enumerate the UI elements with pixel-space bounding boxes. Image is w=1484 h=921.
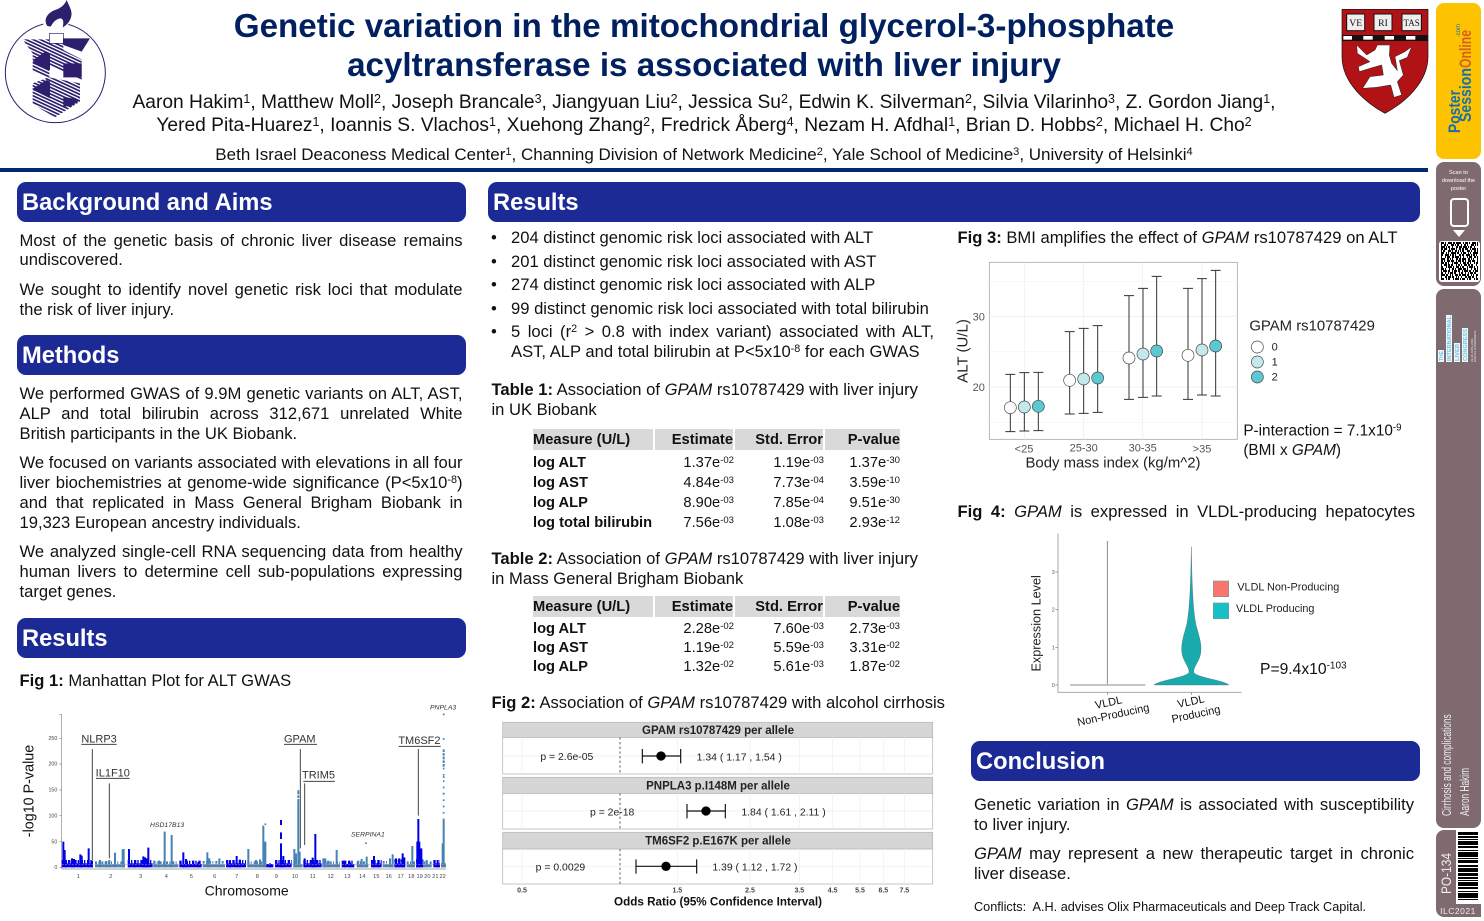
chart: manhattan plot: 21	[432, 874, 438, 880]
chart: violin plot of GPAM expression: VLDL Non-Producing	[1237, 582, 1339, 594]
chart: manhattan plot: Chromosome	[205, 882, 289, 898]
affiliations: Beth Israel Deaconess Medical Center1, Channing Division of Network Medicine2, Yale School of Medicine3, University of Helsinki4	[215, 145, 1193, 164]
sidebar: poster id and barcode: ILC2021	[1440, 906, 1476, 916]
heading: results main: Results	[493, 190, 579, 216]
chart: violin plot of GPAM expression: Non-Producing	[1076, 702, 1151, 729]
table 2: Mass General Brigham Biobank: 2.28e-02	[683, 621, 734, 637]
heading: results	[17, 618, 466, 658]
heading: results main	[488, 182, 1420, 222]
table 1: UK Biobank: 8.90e-03	[683, 495, 734, 511]
chart: violin plot of GPAM expression: VLDL	[1094, 694, 1123, 712]
figure 3 title: Fig 3: BMI amplifies the effect of GPAM rs10787429 on ALT	[958, 228, 1397, 247]
chart: manhattan plot: 11	[310, 874, 316, 880]
table 1: UK Biobank: P-value	[848, 432, 900, 448]
chart: manhattan plot: 20	[424, 874, 430, 880]
chart: manhattan plot: NLRP3	[81, 733, 117, 745]
chart: violin plot of GPAM expression: VLDL Producing	[1236, 603, 1314, 615]
chart: forest plot: Odds Ratio (95% Confidence Interval)	[614, 895, 822, 908]
text: GWAS methods: We performed GWAS of 9.9M genetic variants on ALT, AST,	[20, 384, 462, 403]
chart: forest plot: 1.34 ( 1.17 , 1.54 )	[697, 752, 782, 763]
chart: forest plot: 3.5	[794, 888, 804, 895]
text: variant selection: liver biochemistries at genome-wide significance (P<5x10-8)	[20, 473, 462, 492]
table 2: Mass General Brigham Biobank: P-value	[848, 599, 900, 615]
table 2: Mass General Brigham Biobank: 1.87e-02	[849, 659, 900, 675]
table 2 title: in Mass General Brigham Biobank	[492, 569, 743, 588]
sidebar: scan to download	[1436, 162, 1481, 286]
chart: forest plot: 4.5	[828, 888, 838, 895]
table 2 title	[492, 549, 918, 588]
chart: forest plot: 7.5	[899, 888, 909, 895]
chart: forest plot: PNPLA3 p.I148M per allele	[646, 780, 790, 792]
chart: manhattan plot: 19	[417, 874, 423, 880]
panel: conclusion	[971, 741, 1420, 914]
bullet list of findings: •	[491, 228, 497, 247]
chart: violin plot of GPAM expression: VLDL	[1176, 693, 1206, 711]
table 1: UK Biobank: Measure (U/L)	[533, 432, 630, 448]
table 2: Mass General Brigham Biobank: log AST	[533, 640, 588, 656]
chart: manhattan plot: 15	[373, 874, 379, 880]
chart: violin plot of GPAM expression: P=9.4x10	[1260, 661, 1327, 678]
panel: background and aims	[17, 182, 466, 319]
title: Genetic variation in the mitochondrial glycerol-3-phosphate	[234, 8, 1174, 45]
title	[234, 8, 1174, 84]
chart: ALT by BMI and genotype: 30-35	[1129, 443, 1157, 455]
chart: ALT by BMI and genotype: P-interaction = 7.1x10	[1243, 423, 1393, 440]
chart: forest plot: GPAM rs10787429 per allele	[642, 725, 794, 737]
chart: manhattan plot: 50	[51, 839, 57, 845]
text: therapeutic target: GPAM may represent a new therapeutic target in chronic	[974, 844, 1414, 863]
heading: background and aims: Background and Aims	[22, 190, 273, 216]
chart: manhattan plot: SERPINA1	[351, 832, 385, 839]
logo: university shield	[1342, 9, 1428, 114]
sidebar: scan to download: download the	[1442, 178, 1475, 184]
text: single-cell analysis: target genes.	[20, 582, 116, 601]
text: variant selection: and that replicated in Mass General Brigham Biobank in	[20, 493, 462, 512]
text: GWAS methods: ALP and total bilirubin across 312,671 unrelated White	[20, 404, 462, 423]
chart: ALT by BMI and genotype	[954, 262, 1402, 471]
chart: ALT by BMI and genotype: (BMI x GPAM)	[1243, 442, 1341, 459]
sidebar: poster session online tab: Session	[1456, 68, 1475, 122]
table 2: Mass General Brigham Biobank: 5.61e-03	[773, 659, 824, 675]
chart: ALT by BMI and genotype: 20	[973, 382, 985, 394]
table 1: UK Biobank: log ALT	[533, 455, 586, 471]
chart: manhattan plot: 6	[213, 874, 216, 880]
sidebar: congress information tab: 23-26 JUNE 2021	[1470, 338, 1474, 362]
text: aims	[20, 280, 462, 319]
bullet list of findings: •	[491, 252, 497, 271]
chart: manhattan plot: 1	[77, 874, 80, 880]
bullet list of findings: AST, ALP and total bilirubin at P<5x10-8 for each GWAS	[511, 342, 920, 361]
chart: violin plot of GPAM expression: Producing	[1171, 704, 1222, 726]
title: acyltransferase is associated with liver injury	[347, 47, 1061, 84]
chart: forest plot: p = 2e-18	[590, 807, 635, 818]
bullet list of findings: 5 loci (r2 > 0.8 with index variant) associated with ALT,	[511, 322, 934, 341]
chart: violin plot of GPAM expression: 3	[1052, 570, 1055, 576]
sidebar: poster session online tab: .com	[1456, 24, 1462, 37]
chart: forest plot: 2.5	[745, 888, 755, 895]
chart: forest plot: 6.5	[878, 888, 888, 895]
table 2: Mass General Brigham Biobank: Std. Error	[755, 599, 823, 615]
chart: violin plot of GPAM expression: -103	[1327, 660, 1347, 671]
table 1: UK Biobank	[533, 429, 900, 531]
chart: manhattan plot: 8	[256, 874, 259, 880]
bullet list of findings: •	[491, 275, 497, 294]
logo: medical center emblem	[4, 0, 106, 124]
table 1: UK Biobank: 7.73e-04	[773, 475, 824, 491]
text: conflicts: Conflicts: A.H. advises Olix Pharmaceuticals and Deep Track Capital.	[974, 900, 1366, 914]
chart: ALT by BMI and genotype: >35	[1193, 443, 1211, 455]
text: background: undiscovered.	[20, 250, 123, 269]
chart: forest plot	[502, 722, 934, 908]
heading: conclusion	[971, 741, 1420, 781]
text: background	[20, 230, 462, 269]
text: conclusion statement: to liver injury.	[974, 815, 1071, 834]
chart: manhattan plot: GPAM	[284, 733, 316, 745]
sidebar: poster id and barcode	[1436, 830, 1481, 917]
chart: ALT by BMI and genotype: -9	[1393, 423, 1401, 434]
chart: ALT by BMI and genotype: 1	[1272, 357, 1278, 369]
bullet list of findings: 204 distinct genomic risk loci associated with ALT	[511, 228, 873, 247]
header divider	[0, 168, 1428, 172]
chart: violin plot of GPAM expression: 0	[1052, 683, 1055, 689]
chart: violin plot of GPAM expression: Expression Level	[1030, 575, 1044, 672]
logo: university shield: RI	[1378, 18, 1388, 29]
text: therapeutic target	[974, 844, 1414, 883]
chart: manhattan plot: TM6SF2	[398, 735, 441, 747]
sidebar: poster id and barcode: PO-134	[1438, 853, 1454, 894]
chart: manhattan plot: 100	[48, 813, 57, 819]
chart: forest plot: p = 0.0029	[536, 862, 585, 873]
chart: ALT by BMI and genotype: GPAM rs10787429	[1249, 318, 1375, 334]
sidebar: congress information tab: CONGRESS	[1463, 328, 1469, 361]
chart: manhattan plot: 7	[235, 874, 238, 880]
text: single-cell analysis	[20, 542, 462, 601]
panel: methods	[17, 335, 466, 601]
sidebar: congress information tab: Cirrhosis and complications	[1440, 714, 1455, 816]
chart: manhattan plot	[21, 704, 456, 898]
text: single-cell analysis: human livers to determine cell sub-populations expressing	[20, 562, 462, 581]
chart: manhattan plot: 9	[275, 874, 278, 880]
chart: ALT by BMI and genotype: 25-30	[1070, 443, 1098, 455]
bullet list of findings: 201 distinct genomic risk loci associated with AST	[511, 252, 876, 271]
panel: results main	[488, 182, 1420, 908]
table 1 title	[492, 380, 918, 419]
table 1: UK Biobank: 1.37e-02	[683, 455, 734, 471]
text: therapeutic target: liver disease.	[974, 864, 1071, 883]
table 1: UK Biobank: log ALP	[533, 495, 588, 511]
table 2: Mass General Brigham Biobank: log ALP	[533, 659, 588, 675]
chart: forest plot: 5.5	[855, 888, 865, 895]
heading: results: Results	[22, 626, 108, 652]
chart: manhattan plot: 14	[359, 874, 365, 880]
chart: manhattan plot: 17	[398, 874, 404, 880]
text: aims: We sought to identify novel genetic risk loci that modulate	[20, 280, 462, 299]
table 1: UK Biobank: 9.51e-30	[849, 495, 900, 511]
chart: manhattan plot: 22	[440, 874, 446, 880]
authors: Aaron Hakim1, Matthew Moll2, Joseph Brancale3, Jiangyuan Liu2, Jessica Su2, Edwin K. Silverman2, Silvia Vilarinho3, Z. Gordon Jiang1,	[132, 92, 1276, 113]
chart: manhattan plot: 5	[190, 874, 193, 880]
text: GWAS methods	[20, 384, 462, 443]
chart: manhattan plot: 200	[48, 762, 57, 768]
table 1: UK Biobank: 7.56e-03	[683, 515, 734, 531]
chart: manhattan plot: 18	[408, 874, 414, 880]
table 2: Mass General Brigham Biobank: 1.32e-02	[683, 659, 734, 675]
table 2 title: Table 2: Association of GPAM rs10787429 with liver injury	[492, 549, 918, 568]
sidebar: congress information tab: INTERNATIONAL	[1447, 316, 1453, 361]
heading: methods: Methods	[22, 343, 119, 369]
chart: ALT by BMI and genotype: <25	[1015, 443, 1033, 455]
text: conclusion statement: Genetic variation in GPAM is associated with susceptibility	[974, 795, 1414, 814]
text: variant selection: We focused on variants associated with elevations in all four	[20, 453, 462, 472]
sidebar: congress information tab	[1436, 289, 1481, 828]
table 2: Mass General Brigham Biobank: 5.59e-03	[773, 640, 824, 656]
authors: Yered Pita-Huarez1, Ioannis S. Vlachos1, Xuehong Zhang2, Fredrick Åberg4, Nezam H. Afdhal1, Brian D. Hobbs2, Michael H. Cho2	[156, 115, 1252, 136]
bullet list of findings: •	[491, 299, 497, 318]
table 1: UK Biobank: 1.19e-03	[773, 455, 824, 471]
table 2: Mass General Brigham Biobank: Estimate	[672, 599, 733, 615]
table 1: UK Biobank: Std. Error	[755, 432, 823, 448]
chart: ALT by BMI and genotype: 0	[1272, 342, 1278, 354]
table 2: Mass General Brigham Biobank	[533, 596, 900, 675]
chart: manhattan plot: HSD17B13	[150, 822, 184, 829]
chart: manhattan plot: 13	[344, 874, 350, 880]
table 1: UK Biobank: 1.08e-03	[773, 515, 824, 531]
chart: forest plot: 0.5	[517, 888, 527, 895]
table 1: UK Biobank: 3.59e-10	[849, 475, 900, 491]
bullet list of findings: •	[491, 322, 497, 341]
logo: university shield: TAS	[1404, 18, 1420, 28]
text: GWAS methods: British participants in the UK Biobank.	[20, 424, 297, 443]
text: background: Most of the genetic basis of chronic liver disease remains	[20, 230, 462, 250]
chart: manhattan plot: 2	[109, 874, 112, 880]
text: aims: the risk of liver injury.	[20, 300, 174, 319]
sidebar: congress information tab: DIGITAL EXPERIENCE	[1473, 330, 1477, 362]
chart: violin plot of GPAM expression: 2	[1052, 608, 1055, 614]
table 1: UK Biobank: log total bilirubin	[533, 515, 652, 531]
figure 2 title: Fig 2: Association of GPAM rs10787429 with alcohol cirrhosis	[492, 693, 945, 712]
heading: conclusion: Conclusion	[976, 749, 1105, 775]
panel: results left	[17, 618, 466, 898]
chart: manhattan plot: 250	[48, 736, 57, 742]
heading: background and aims	[17, 182, 466, 222]
chart: manhattan plot: 12	[328, 874, 334, 880]
chart: manhattan plot: 10	[292, 874, 298, 880]
table 2: Mass General Brigham Biobank: 1.19e-02	[683, 640, 734, 656]
table 2: Mass General Brigham Biobank: log ALT	[533, 621, 586, 637]
text: conclusion statement	[974, 795, 1414, 834]
sidebar: poster session online tab: Online	[1456, 30, 1475, 68]
chart: manhattan plot: 3	[139, 874, 142, 880]
chart: manhattan plot: 4	[165, 874, 168, 880]
chart: manhattan plot: TRIM5	[302, 769, 335, 781]
text: single-cell analysis: We analyzed single-cell RNA sequencing data from healthy	[20, 542, 462, 561]
sidebar: scan to download: poster	[1451, 186, 1466, 192]
table 1: UK Biobank: 7.85e-04	[773, 495, 824, 511]
sidebar: poster session online tab	[1436, 3, 1481, 159]
bullet list of findings: 99 distinct genomic risk loci associated with total bilirubin	[511, 299, 929, 318]
table 2: Mass General Brigham Biobank: Measure (U/L)	[533, 599, 630, 615]
chart: manhattan plot: 150	[48, 788, 57, 794]
text: variant selection	[20, 453, 462, 532]
chart: ALT by BMI and genotype: Body mass index (kg/m^2)	[1026, 455, 1201, 471]
chart: ALT by BMI and genotype: ALT (U/L)	[954, 319, 971, 383]
chart: forest plot: 1.39 ( 1.12 , 1.72 )	[712, 863, 798, 874]
table 1: UK Biobank: 4.84e-03	[683, 475, 734, 491]
bullet list of findings: 274 distinct genomic risk loci associated with ALP	[511, 275, 875, 294]
chart: ALT by BMI and genotype: 2	[1272, 372, 1278, 384]
chart: forest plot: p = 2.6e-05	[540, 752, 594, 763]
table 1 title: in UK Biobank	[492, 400, 597, 419]
bullet list of findings	[491, 228, 934, 361]
figure 4 title: Fig 4: GPAM is expressed in VLDL-producing hepatocytes	[958, 502, 1415, 521]
chart: violin plot of GPAM expression: 1	[1052, 645, 1055, 651]
chart: manhattan plot: PNPLA3	[430, 704, 456, 711]
sidebar: poster session online tab: Poster	[1445, 90, 1464, 133]
logo: university shield: VE	[1349, 18, 1362, 29]
chart: forest plot: 1.5	[672, 888, 682, 895]
table 2: Mass General Brigham Biobank: 2.73e-03	[849, 621, 900, 637]
sidebar: scan to download: Scan to	[1449, 170, 1468, 176]
sidebar: congress information tab: LIVER	[1455, 344, 1461, 361]
authors	[132, 92, 1276, 136]
chart: manhattan plot: IL1F10	[96, 768, 130, 780]
chart: ALT by BMI and genotype: 30	[973, 311, 985, 323]
heading: methods	[17, 335, 466, 375]
table 2: Mass General Brigham Biobank: 3.31e-02	[849, 640, 900, 656]
table 1: UK Biobank: 2.93e-12	[849, 515, 900, 531]
table 1: UK Biobank: 1.37e-30	[849, 455, 900, 471]
chart: manhattan plot: -log10 P-value	[21, 745, 37, 837]
figure 1 title: Fig 1: Manhattan Plot for ALT GWAS	[20, 671, 291, 690]
chart: manhattan plot: 0	[54, 865, 57, 871]
sidebar: congress information tab: THE	[1439, 350, 1445, 361]
chart: manhattan plot: 16	[386, 874, 392, 880]
chart: violin plot of GPAM expression	[1030, 533, 1347, 729]
chart: forest plot: 1.84 ( 1.61 , 2.11 )	[741, 807, 826, 818]
sidebar: congress information tab: Aaron Hakim	[1458, 768, 1473, 816]
table 1: UK Biobank: Estimate	[672, 432, 733, 448]
text: variant selection: 19,323 European ancestry individuals.	[20, 513, 301, 532]
chart: forest plot: TM6SF2 p.E167K per allele	[645, 836, 791, 848]
table 1 title: Table 1: Association of GPAM rs10787429 with liver injury	[492, 380, 918, 399]
table 2: Mass General Brigham Biobank: 7.60e-03	[773, 621, 824, 637]
table 1: UK Biobank: log AST	[533, 475, 588, 491]
